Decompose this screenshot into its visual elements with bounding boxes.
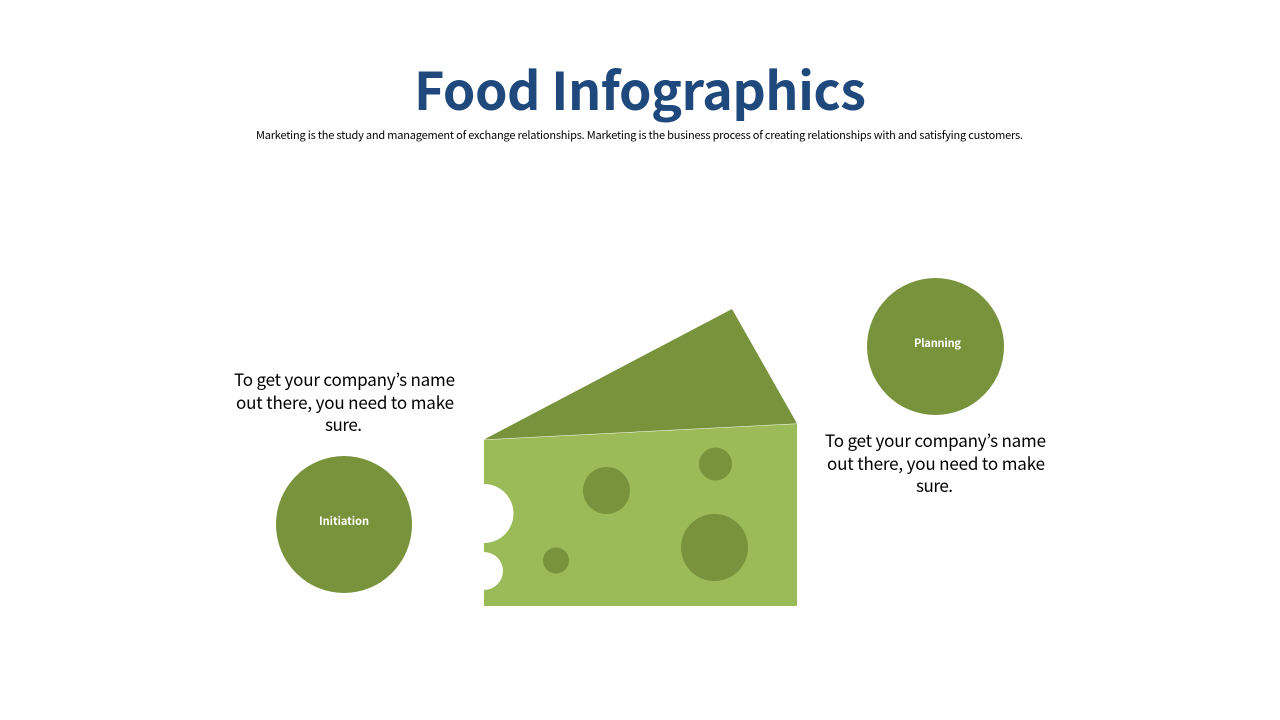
circle: Initiation <box>276 456 412 593</box>
cheese front face <box>484 424 797 606</box>
left text block: To get your company’s name <box>234 366 455 391</box>
right text block: To get your company’s name <box>825 427 1046 452</box>
circle: Planning <box>867 278 1004 415</box>
title: Food Infographics <box>414 50 866 125</box>
left text block: sure. <box>325 411 362 436</box>
cheese illustration <box>484 309 797 606</box>
left text block: out there, you need to make <box>236 389 454 414</box>
right text block: sure. <box>916 472 953 497</box>
right text block <box>825 427 1046 497</box>
label: Initiation: Initiation <box>319 513 369 529</box>
subtitle text: Marketing is the study and management of exchange relationships. Marketing is the business process of creating relationships with and satisfying customers. <box>256 127 1023 143</box>
left text block <box>234 366 455 436</box>
cheese top wedge <box>484 309 797 440</box>
cheese holes <box>543 448 748 581</box>
label: Planning: Planning <box>914 335 961 351</box>
right text block: out there, you need to make <box>827 450 1045 475</box>
